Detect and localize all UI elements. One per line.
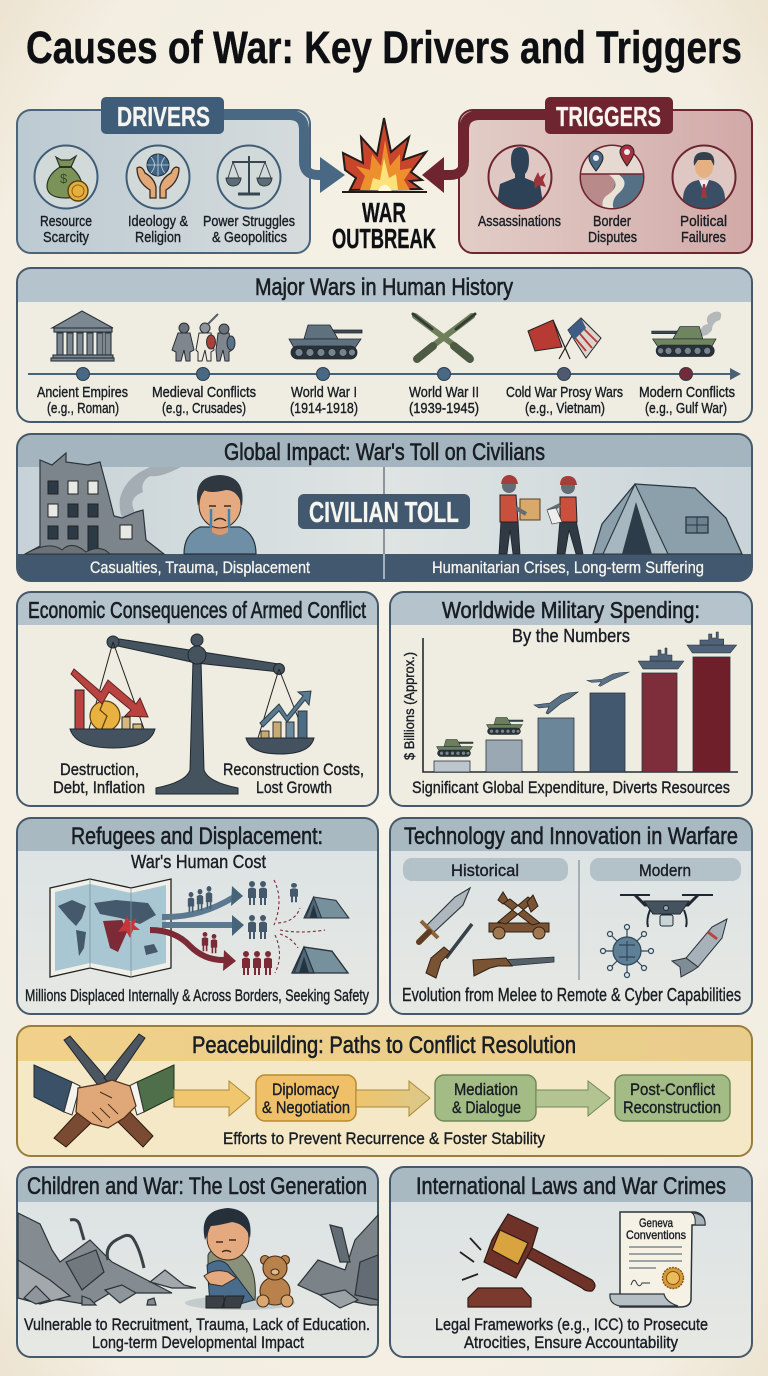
- icon: small tank: [436, 740, 473, 756]
- icon: power struggles scales: [218, 146, 280, 208]
- label: resource scarcity: [40, 213, 92, 246]
- label: war outbreak: [332, 197, 436, 254]
- label: ideology and religion: Religion: [135, 229, 181, 246]
- icon: rifle: [473, 957, 554, 976]
- label: power struggles and geopolitics: Power Struggles: [203, 213, 295, 230]
- icon: warship: [638, 648, 684, 669]
- illustration: aid workers: [499, 475, 583, 554]
- label: resource scarcity: Scarcity: [43, 229, 89, 246]
- icon: catapult: [489, 892, 549, 939]
- bar chart: [423, 632, 738, 772]
- caption: destruction: Destruction,: [60, 760, 139, 779]
- y axis label: $ Billions (Approx.): [401, 652, 417, 760]
- label: world war one: (1914-1918): [290, 400, 358, 417]
- tag: drivers: DRIVERS: [117, 101, 210, 132]
- tag: drivers: [101, 97, 224, 134]
- tag: triggers: TRIGGERS: [556, 101, 661, 132]
- panel: drivers: [17, 97, 345, 253]
- icon: missile: [672, 919, 727, 977]
- panel: military spending: [390, 592, 752, 806]
- icon: explosion: [342, 118, 427, 192]
- label: cold war proxy wars: Cold War Prosy Wars: [506, 384, 623, 401]
- pill: historical: Historical: [451, 861, 519, 880]
- label: power struggles and geopolitics: [203, 213, 295, 246]
- label: power struggles and geopolitics: & Geopolitics: [212, 229, 287, 246]
- label: ideology and religion: [128, 213, 188, 246]
- icon: musket: [426, 924, 472, 978]
- tag: triggers: [545, 97, 673, 134]
- box: post-conflict reconstruction: [615, 1075, 730, 1121]
- label: resource scarcity: Resource: [40, 213, 92, 230]
- panel: peacebuilding: [17, 1026, 752, 1156]
- label: modern conflicts: (e.g., Gulf War): [645, 400, 727, 417]
- panel: triggers: [422, 97, 752, 253]
- box: post-conflict reconstruction: Post-Conflict: [630, 1080, 715, 1099]
- label: world war one: World War I: [291, 384, 357, 401]
- caption: peacebuilding: Efforts to Prevent Recurrence & Foster Stability: [223, 1129, 545, 1148]
- label: war outbreak: WAR: [362, 197, 406, 228]
- heading: military spending: Worldwide Military Spending:: [442, 597, 700, 623]
- pill: modern: Modern: [639, 861, 691, 880]
- icon: crossed guns: [413, 314, 475, 359]
- caption: refugees: Millions Displaced Internally & Across Borders, Seeking Safety: [25, 986, 369, 1005]
- icon: drone: [620, 895, 713, 927]
- icon: larger tank: [486, 718, 523, 734]
- illustration: teddy bear: [257, 1256, 293, 1307]
- label: world war two: (1939-1945): [409, 400, 479, 417]
- arrow: drivers to war outbreak: [222, 115, 345, 193]
- box: diplomacy: [256, 1075, 356, 1121]
- label: ancient empires: (e.g., Roman): [47, 400, 119, 417]
- timeline axis: [28, 368, 741, 380]
- label: medieval conflicts: [152, 384, 256, 417]
- box: diplomacy: & Negotiation: [262, 1098, 350, 1117]
- illustration: crying person: [184, 475, 256, 554]
- box: diplomacy: Diplomacy: [272, 1080, 339, 1099]
- caption: destruction: [53, 760, 145, 797]
- panel: refugees: [17, 818, 378, 1014]
- arrow: to mediation: [356, 1081, 430, 1116]
- dashed routes: [274, 880, 325, 973]
- caption: destruction: Debt, Inflation: [53, 778, 145, 797]
- label: war outbreak: OUTBREAK: [332, 223, 436, 254]
- icon group: refugees: [188, 881, 298, 975]
- illustration: right pan: [246, 669, 314, 754]
- icon: handshake with crossed rifles: [34, 1034, 174, 1147]
- caption: laws: [435, 1315, 708, 1352]
- icon: border disputes map: [580, 145, 644, 210]
- arrow: displacement east: [162, 915, 244, 936]
- label: world war two: [409, 384, 479, 417]
- arrow: displacement north: [162, 886, 243, 917]
- label: ancient empires: Ancient Empires: [37, 384, 128, 401]
- caption: reconstruction: [223, 760, 364, 797]
- icon: political failures figure: [672, 146, 736, 210]
- label: world war one: [290, 384, 358, 417]
- caption: children: [24, 1315, 370, 1352]
- label: modern conflicts: Modern Conflicts: [639, 384, 735, 401]
- panel: technology: [390, 818, 752, 1014]
- label: ancient empires: [37, 384, 128, 417]
- icon: ideology and religion: [126, 146, 190, 208]
- label: political failures: Political: [680, 213, 727, 230]
- illustration: rubble left: [18, 1213, 196, 1305]
- icon: fighter jet: [534, 692, 578, 714]
- caption: casualties: Casualties, Trauma, Displacement: [90, 558, 310, 577]
- pill: modern: [590, 858, 741, 881]
- label: cold war proxy wars: (e.g., Vietnam): [525, 400, 605, 417]
- box: mediation: & Dialogue: [452, 1098, 521, 1117]
- illustration: relief tent: [593, 484, 742, 554]
- panel: civilian toll: [17, 434, 752, 581]
- illustration: rubble right: [298, 1215, 378, 1308]
- icon: geneva conventions scroll: [610, 1212, 705, 1307]
- label: ideology and religion: Ideology &: [128, 213, 188, 230]
- icon: medieval soldiers: [172, 314, 235, 361]
- icon: sword: [419, 888, 470, 942]
- illustration: balance scale: [107, 634, 284, 794]
- subheading: by the numbers: By the Numbers: [512, 626, 630, 646]
- arrow: triggers to war outbreak: [422, 115, 547, 193]
- icon: assassination silhouette: [488, 146, 552, 210]
- heading: major wars: Major Wars in Human History: [255, 274, 513, 301]
- illustration: smoke: [120, 467, 181, 528]
- icon: resource scarcity money bag: [34, 146, 98, 208]
- icon: world war one tank: [289, 325, 362, 359]
- icon: cyber virus: [600, 924, 654, 978]
- heading: economic consequences: Economic Consequences of Armed Conflict: [28, 597, 366, 623]
- icon: gavel: [460, 1214, 595, 1307]
- heading: peacebuilding: Peacebuilding: Paths to Conflict Resolution: [192, 1032, 576, 1059]
- illustration: left pan: [70, 642, 155, 748]
- label: border disputes: Border: [593, 213, 631, 230]
- tag: civilian toll: CIVILIAN TOLL: [309, 497, 459, 529]
- caption: reconstruction: Reconstruction Costs,: [223, 760, 364, 779]
- label: medieval conflicts: (e.g., Crusades): [162, 400, 246, 417]
- caption: laws: Atrocities, Ensure Accountability: [464, 1333, 678, 1352]
- label: political failures: [680, 213, 727, 246]
- panel: children and war: [17, 1167, 378, 1357]
- caption: humanitarian crises: Humanitarian Crises, Long-term Suffering: [432, 558, 704, 577]
- panel: economic consequences: [17, 592, 378, 806]
- icon: cold war flags: [528, 318, 601, 359]
- label: medieval conflicts: Medieval Conflicts: [152, 384, 256, 401]
- heading: civilian toll: Global Impact: War's Toll on Civilians: [224, 439, 545, 466]
- label: assassinations: Assassinations: [478, 213, 561, 230]
- icon: modern tank with smoke: [652, 312, 721, 357]
- arrow: to diplomacy: [174, 1081, 250, 1116]
- label: border disputes: Disputes: [588, 229, 637, 246]
- icon: geneva conventions scroll: Geneva: [639, 1216, 673, 1230]
- label: world war two: World War II: [409, 384, 479, 401]
- label: border disputes: [588, 213, 637, 246]
- subheading: human cost: War's Human Cost: [131, 852, 266, 872]
- box: mediation: Mediation: [454, 1080, 518, 1099]
- pill: historical: [403, 858, 568, 881]
- caption: children: Vulnerable to Recruitment, Trauma, Lack of Education.: [24, 1315, 370, 1334]
- arrow: displacement south: [150, 930, 236, 971]
- panel: international laws: [390, 1167, 752, 1357]
- illustration: ruined building: [25, 453, 164, 554]
- box: mediation: [435, 1075, 536, 1121]
- icon: large warship: [687, 632, 737, 653]
- tag: civilian toll: [298, 494, 470, 529]
- caption: reconstruction: Lost Growth: [256, 778, 332, 797]
- illustration: world map: [50, 879, 171, 977]
- label: cold war proxy wars: [506, 384, 623, 417]
- icon: modern jet: [587, 672, 629, 686]
- caption: laws: Legal Frameworks (e.g., ICC) to Prosecute: [435, 1315, 708, 1334]
- heading: children: Children and War: The Lost Generation: [27, 1173, 367, 1200]
- icon: temple: [51, 311, 114, 361]
- arrow: to reconstruction: [536, 1081, 610, 1116]
- label: modern conflicts: [639, 384, 735, 417]
- panel: major wars timeline: [17, 268, 752, 422]
- icon: geneva conventions scroll: Conventions: [626, 1228, 686, 1242]
- illustration: child: [185, 1208, 295, 1310]
- caption: children: Long-term Developmental Impact: [92, 1333, 304, 1352]
- heading: refugees: Refugees and Displacement:: [71, 823, 323, 850]
- icon: refugee tent lower: [292, 947, 348, 973]
- label: political failures: Failures: [681, 229, 726, 246]
- icon: resource scarcity money bag: $: [60, 171, 68, 186]
- box: post-conflict reconstruction: Reconstruction: [623, 1098, 721, 1117]
- icon: refugee tent upper: [304, 897, 349, 918]
